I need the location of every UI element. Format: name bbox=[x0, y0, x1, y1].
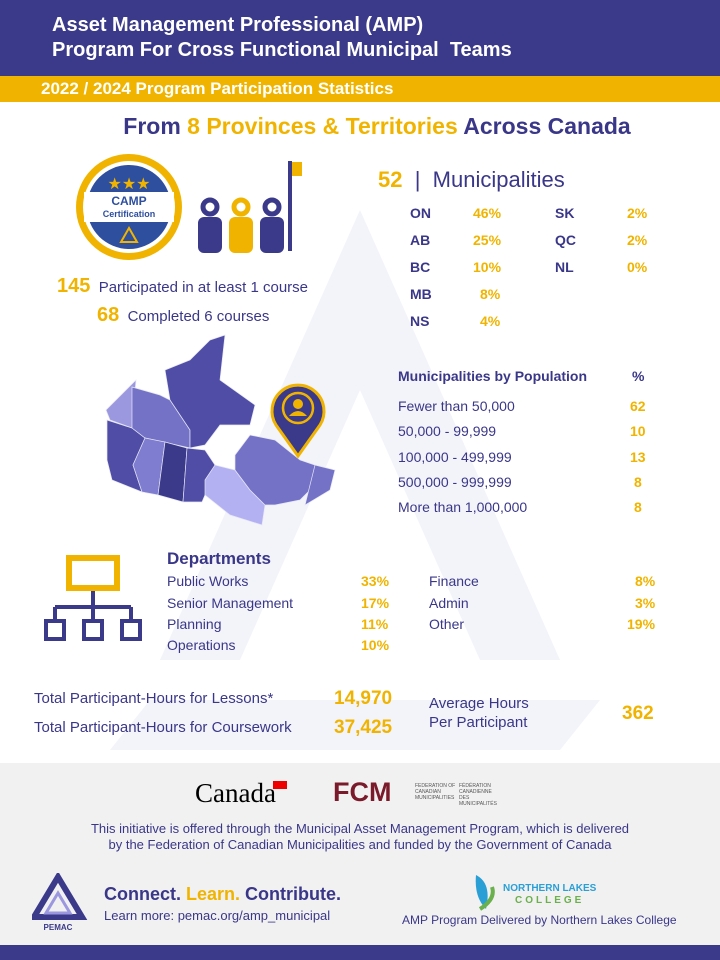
departments: 10% bbox=[361, 637, 389, 653]
province table: 4% bbox=[480, 313, 500, 329]
departments: Public Works bbox=[167, 573, 248, 589]
departments: 17% bbox=[361, 595, 389, 611]
province table: 8% bbox=[480, 286, 500, 302]
funding text bbox=[91, 821, 629, 852]
tagline: Connect. Learn. Contribute. bbox=[104, 884, 341, 904]
population table: 62 bbox=[630, 398, 646, 414]
population table: 8 bbox=[634, 474, 642, 490]
province table: MB bbox=[410, 286, 432, 302]
population table: 10 bbox=[630, 423, 646, 439]
departments: Senior Management bbox=[167, 595, 293, 611]
icon: location pin bbox=[270, 384, 326, 458]
departments: 33% bbox=[361, 573, 389, 589]
province table: ON bbox=[410, 205, 431, 221]
funding text: This initiative is offered through the Municipal Asset Management Program, which is delivered bbox=[91, 821, 629, 836]
province table: 25% bbox=[473, 232, 501, 248]
background watermark bbox=[110, 211, 600, 750]
province table: 0% bbox=[627, 259, 647, 275]
funding text: by the Federation of Canadian Municipalities and funded by the Government of Canada bbox=[108, 837, 612, 852]
delivered by text: AMP Program Delivered by Northern Lakes College bbox=[402, 913, 677, 927]
icon: org chart bbox=[44, 555, 142, 641]
icon: CAMP badge: ★★★ bbox=[107, 176, 151, 193]
hours stats bbox=[34, 688, 654, 738]
province table: QC bbox=[555, 232, 576, 248]
population table: More than 1,000,000 bbox=[398, 499, 527, 515]
hours stats: 362 bbox=[622, 703, 654, 724]
province table: 2% bbox=[627, 205, 647, 221]
logo: Northern Lakes College: NORTHERN LAKES bbox=[503, 883, 596, 894]
departments: Admin bbox=[429, 595, 469, 611]
logo: PEMAC: PEMAC bbox=[44, 923, 73, 932]
province table: SK bbox=[555, 205, 574, 221]
population table: 50,000 - 99,999 bbox=[398, 423, 496, 439]
logo: PEMAC bbox=[32, 873, 88, 932]
footer panel: FEDERATION OF CANADIAN MUNICIPALITIES bbox=[415, 783, 455, 801]
stat: participants: 145 Participated in at least 1 course bbox=[57, 275, 308, 297]
departments: 19% bbox=[627, 616, 655, 632]
footer panel bbox=[0, 763, 720, 945]
logo: Northern Lakes College: COLLEGE bbox=[515, 895, 584, 906]
province table: 10% bbox=[473, 259, 501, 275]
subtitle bar bbox=[0, 76, 720, 102]
icon: CAMP badge bbox=[76, 154, 182, 260]
departments: Other bbox=[429, 616, 464, 632]
header banner: Asset Management Professional (AMP) bbox=[52, 14, 423, 36]
icon: CAMP badge: Certification bbox=[103, 209, 155, 219]
province table: 46% bbox=[473, 205, 501, 221]
header banner bbox=[0, 0, 720, 76]
province table: AB bbox=[410, 232, 430, 248]
population table: 8 bbox=[634, 499, 642, 515]
population table: Fewer than 50,000 bbox=[398, 398, 515, 414]
population table: % bbox=[632, 368, 644, 384]
header banner: Program For Cross Functional Municipal Teams bbox=[52, 39, 512, 61]
departments: 8% bbox=[635, 573, 655, 589]
departments: 3% bbox=[635, 595, 655, 611]
stat: completed: 68 Completed 6 courses bbox=[97, 304, 269, 326]
hours stats: 37,425 bbox=[334, 717, 392, 738]
subtitle bar: 2022 / 2024 Program Participation Statistics bbox=[41, 79, 393, 98]
logo: Canada: Canada bbox=[195, 778, 276, 808]
province table: NL bbox=[555, 259, 574, 275]
map of Canada bbox=[106, 334, 336, 526]
population table: 500,000 - 999,999 bbox=[398, 474, 512, 490]
population table: Municipalities by Population bbox=[398, 368, 587, 384]
bottom band bbox=[0, 945, 720, 960]
population table: 100,000 - 499,999 bbox=[398, 449, 512, 465]
main heading: From 8 Provinces & Territories Across Canada bbox=[123, 113, 631, 139]
footer panel: FÉDÉRATION CANADIENNE DES MUNICIPALITÉS bbox=[459, 783, 497, 807]
province table bbox=[410, 205, 647, 329]
logo: Northern Lakes College bbox=[476, 875, 596, 911]
province table: NS bbox=[410, 313, 429, 329]
icon: CAMP badge: CAMP bbox=[111, 194, 147, 208]
tagline: Learn more: pemac.org/amp_municipal bbox=[104, 908, 330, 923]
departments: Departments bbox=[167, 549, 271, 568]
province table: BC bbox=[410, 259, 430, 275]
population table bbox=[398, 368, 646, 515]
icon: people with flag bbox=[198, 161, 302, 253]
departments: Operations bbox=[167, 637, 235, 653]
departments: 11% bbox=[361, 616, 388, 632]
departments: Planning bbox=[167, 616, 222, 632]
departments: Finance bbox=[429, 573, 479, 589]
departments bbox=[167, 549, 655, 653]
hours stats: Total Participant-Hours for Coursework bbox=[34, 719, 292, 736]
logo: FCM: FCM bbox=[333, 777, 391, 807]
logo: FCM bbox=[333, 777, 497, 807]
municipalities heading: 52 | Municipalities bbox=[378, 167, 565, 192]
hours stats: Average Hours bbox=[429, 695, 529, 712]
hours stats: 14,970 bbox=[334, 688, 392, 709]
population table: 13 bbox=[630, 449, 646, 465]
tagline bbox=[104, 884, 341, 923]
hours stats: Per Participant bbox=[429, 714, 527, 731]
province table: 2% bbox=[627, 232, 647, 248]
hours stats: Total Participant-Hours for Lessons* bbox=[34, 690, 273, 707]
